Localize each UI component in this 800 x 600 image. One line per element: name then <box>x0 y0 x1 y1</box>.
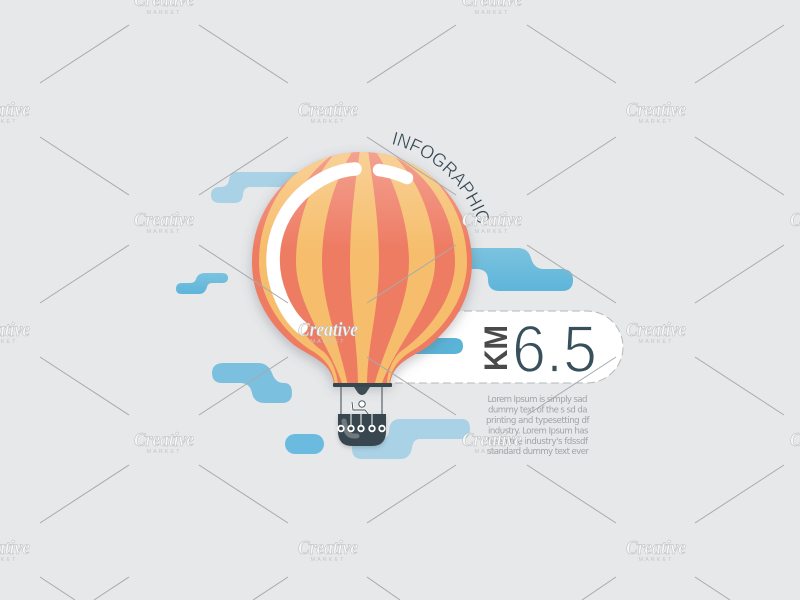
watermarks: MARKET <box>475 229 509 235</box>
cloud: small left <box>176 273 228 294</box>
watermarks: MARKET <box>639 339 673 345</box>
watermarks: MARKET <box>147 229 181 235</box>
envelope <box>250 150 475 386</box>
unit KM: KM <box>478 325 514 371</box>
watermarks: Creative <box>298 319 358 341</box>
cloud: bottom light <box>352 419 470 459</box>
cloud: top left <box>211 172 310 203</box>
watermarks: Creative <box>298 99 358 121</box>
envelope base <box>250 150 475 386</box>
watermarks: Creative <box>462 209 522 231</box>
watermarks: Creative <box>626 99 686 121</box>
cloud: pill <box>285 434 324 454</box>
basket rope ties <box>338 414 385 431</box>
value 6.5: 6.5 <box>512 312 597 387</box>
basket highlight <box>344 421 357 436</box>
watermarks: MARKET <box>639 557 673 563</box>
highlight arc <box>273 169 355 327</box>
watermarks: MARKET <box>311 339 345 345</box>
neck collar <box>333 383 392 387</box>
watermarks: MARKET <box>147 10 181 16</box>
envelope sheen <box>256 152 467 232</box>
watermarks: MARKET <box>475 449 509 455</box>
ropes <box>341 386 382 415</box>
highlight short <box>379 170 407 178</box>
watermarks: MARKET <box>147 449 181 455</box>
body text: industry. Lorem Ipsum has <box>488 426 589 436</box>
cloud: lower left <box>212 363 292 403</box>
watermarks: Creative <box>626 537 686 559</box>
cloud: behind label <box>405 338 463 354</box>
watermarks: MARKET <box>475 10 509 16</box>
body text: Lorem Ipsum is simply sad <box>488 395 588 405</box>
watermarks: MARKET <box>639 119 673 125</box>
body text: printing and typesetting df <box>486 416 590 426</box>
watermarks: MARKET <box>311 119 345 125</box>
label pill <box>380 311 623 383</box>
body text: standard dummy text ever <box>487 447 589 457</box>
watermarks: Creative <box>134 429 194 451</box>
body text: been the industry's fdssdf <box>488 437 589 447</box>
balloon <box>250 150 475 446</box>
basket body <box>338 414 386 446</box>
watermarks: Creative <box>626 319 686 341</box>
curved title: INFOGRAPHIC <box>392 132 489 223</box>
body text: dummy text of the s sd da <box>488 406 588 416</box>
watermarks: Creative <box>298 537 358 559</box>
body text <box>486 395 590 457</box>
passenger <box>352 401 369 415</box>
watermarks: Creative <box>462 429 522 451</box>
envelope stripes <box>259 150 467 386</box>
watermarks: Creative <box>134 209 194 231</box>
watermarks: MARKET <box>311 557 345 563</box>
cloud: right <box>460 248 573 291</box>
distance label <box>380 311 623 387</box>
burner <box>354 387 370 395</box>
basket assembly <box>338 386 386 446</box>
